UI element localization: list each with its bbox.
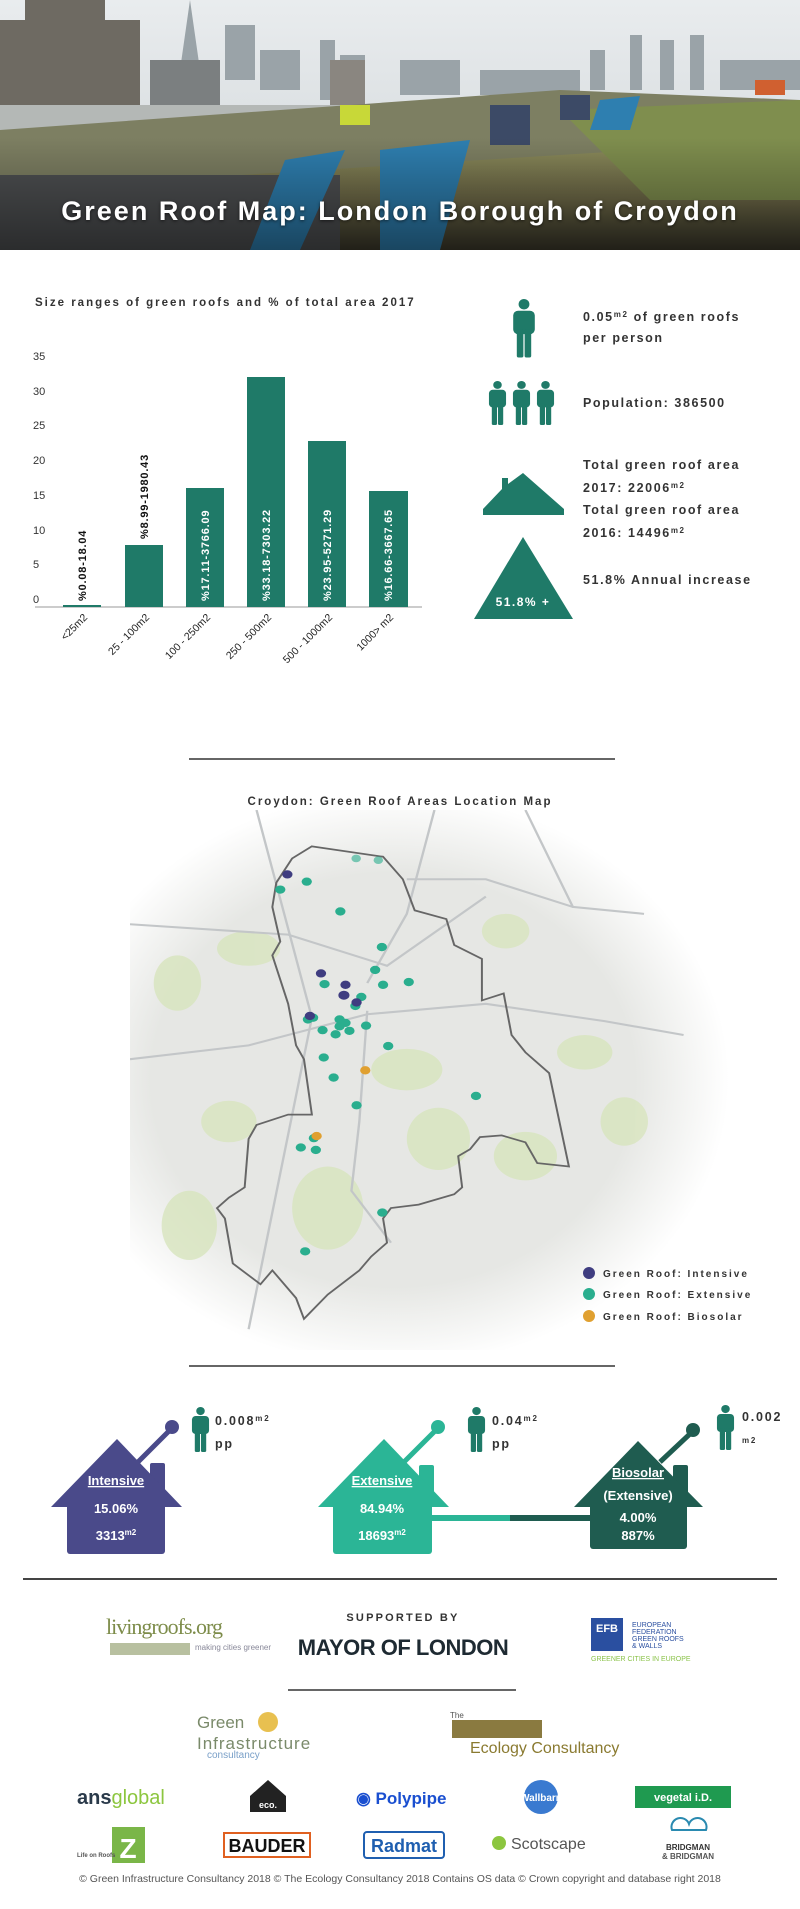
connector bar [430,1515,592,1521]
main graphics: 0.008 [215,1414,255,1428]
main graphics: pp [492,1437,511,1451]
stats text: 2017: 22006 [583,481,671,495]
sponsor logos row 2: Life on Roofs [77,1853,116,1859]
sponsor logos row 2: Z [119,1833,137,1864]
map legend: Green Roof: Intensive [603,1269,749,1280]
sponsor logos row 1 [77,1780,731,1814]
skyline [180,0,800,100]
footer copyright: © Green Infrastructure Consultancy 2018 © The Ecology Consultancy 2018 Contains OS data © Crown copyright and database right 2018 [79,1873,721,1885]
house: intensive: 3313 [96,1528,125,1543]
sponsor logos row 1: ◉ Polypipe [356,1789,446,1808]
logo: EFB: GREENER CITIES IN EUROPE [591,1656,691,1663]
logo: ecology consultancy [450,1711,619,1757]
bar chart: 10 [33,525,45,537]
stats text [583,310,752,587]
logo: EFB: & WALLS [632,1643,662,1650]
chart title: Size ranges of green roofs and % of total area 2017 [35,297,416,309]
per-person icons and labels [192,1405,734,1452]
bar chart: 0 [33,594,39,606]
sponsor logos row 1: Wallbarn [520,1793,562,1804]
house: extensive: 84.94% [360,1501,404,1516]
sponsor logos row 2: BRIDGMAN [666,1843,710,1852]
sponsor logos row 2: Radmat [371,1836,437,1856]
roof railing [0,105,800,150]
bar chart: %16.66-3667.65 [383,509,395,601]
sponsor logos row 1: ansglobal [77,1787,165,1809]
logo: EFB: EUROPEAN [632,1622,671,1629]
bar chart: <25m2 [59,612,90,643]
icon: triangle: 51.8% + [496,595,550,609]
stats text: per person [583,331,664,345]
stats text: 2016: 14496 [583,526,671,540]
stats text: of green roofs [628,310,740,324]
bar chart: 5 [33,559,39,571]
main graphics: 0.04 [492,1414,524,1428]
house: biosolar: (Extensive) [603,1488,673,1503]
bar chart: 35 [33,351,45,363]
bar chart: 250 - 500m2 [224,612,274,662]
stats text: m2 [671,526,686,535]
house: intensive: 15.06% [94,1501,138,1516]
sponsor logos row 1: eco. [259,1800,277,1810]
house: biosolar: Biosolar [612,1465,664,1480]
hero photo banner [0,0,800,250]
stats text: Population: 386500 [583,396,726,410]
map legend: Green Roof: Biosolar [603,1312,744,1323]
supported by mayor of london [298,1612,508,1660]
logo: green infrastructure consultancy: Green [197,1713,244,1732]
logo: EFB: FEDERATION [632,1629,677,1636]
bar chart: 15 [33,490,45,502]
house: extensive: Extensive [352,1473,412,1488]
bar chart: %17.11-3766.09 [200,510,212,601]
map [130,810,700,1344]
logo: livingroofs.org: livingroofs.org [106,1614,223,1639]
bar chart: 30 [33,386,45,398]
house: extensive [318,1420,449,1554]
house: extensive: 18693 [358,1528,394,1543]
left building [0,0,140,160]
house: biosolar [574,1423,703,1549]
logo: EFB: GREEN ROOFS [632,1636,684,1643]
stats text: Total green roof area [583,503,740,517]
main graphics: pp [215,1437,234,1451]
bar chart: 25 [33,420,45,432]
logo: ecology consultancy: Ecology Consultancy [470,1740,619,1757]
stats text: Total green roof area [583,458,740,472]
sponsor logos row 2 [77,1818,714,1864]
logo: EFB [591,1618,691,1663]
supported by mayor of london: MAYOR OF LONDON [298,1635,508,1660]
logo: green infrastructure consultancy: consultancy [207,1750,260,1761]
icon: house [483,473,564,515]
bar chart: %0.08-18.04 [77,530,89,601]
bar chart: %23.95-5271.29 [322,509,334,601]
bar chart: 500 - 1000m2 [281,612,335,666]
bar chart: %33.18-7303.22 [261,509,273,601]
logo: ecology consultancy: The [450,1711,464,1720]
icon: three people [489,381,554,425]
bar chart [33,351,422,666]
logo: livingroofs.org [106,1614,271,1655]
map legend [583,1267,752,1323]
stats text: m2 [671,481,686,490]
stats text: 51.8% Annual increase [583,573,752,587]
stats text: m2 [614,310,628,319]
bar chart: 20 [33,455,45,467]
logo: EFB: EFB [596,1623,618,1635]
borough boundary [217,846,569,1319]
hero title: Green Roof Map: London Borough of Croydon [61,196,739,226]
house: intensive: m2 [125,1528,137,1537]
house: biosolar: 887% [621,1528,655,1543]
logo: green infrastructure consultancy: Infrastructure [197,1734,311,1753]
bar chart: 1000> m2 [354,612,396,653]
bar chart: %8.99-1980.43 [139,454,151,539]
house: extensive: m2 [394,1528,406,1537]
sponsor logos row 2: BAUDER [228,1836,306,1856]
house: intensive [51,1420,182,1554]
sponsor logos row 2: & BRIDGMAN [662,1852,714,1861]
stats panel [474,299,573,619]
sponsor logos row 1: vegetal i.D. [654,1792,712,1804]
logo: green infrastructure consultancy [197,1712,311,1761]
supported by mayor of london: SUPPORTED BY [346,1612,460,1624]
bar chart: 100 - 250m2 [163,612,213,662]
map title: Croydon: Green Roof Areas Location Map [248,796,552,808]
main graphics: m2 [255,1414,270,1423]
icon: person [513,299,535,358]
map legend: Green Roof: Extensive [603,1290,752,1301]
main graphics: 0.002 [742,1410,782,1424]
bar chart: 25 - 100m2 [106,612,152,658]
main graphics: m2 [742,1436,757,1445]
house: intensive: Intensive [88,1473,144,1488]
stats text: 0.05 [583,310,614,324]
sponsor logos row 2: Scotscape [511,1836,586,1853]
house: biosolar: 4.00% [620,1510,657,1525]
logo: livingroofs.org: making cities greener [195,1643,271,1652]
icon: triangle [474,537,573,619]
deck chairs [250,96,640,250]
main graphics: m2 [524,1414,539,1423]
